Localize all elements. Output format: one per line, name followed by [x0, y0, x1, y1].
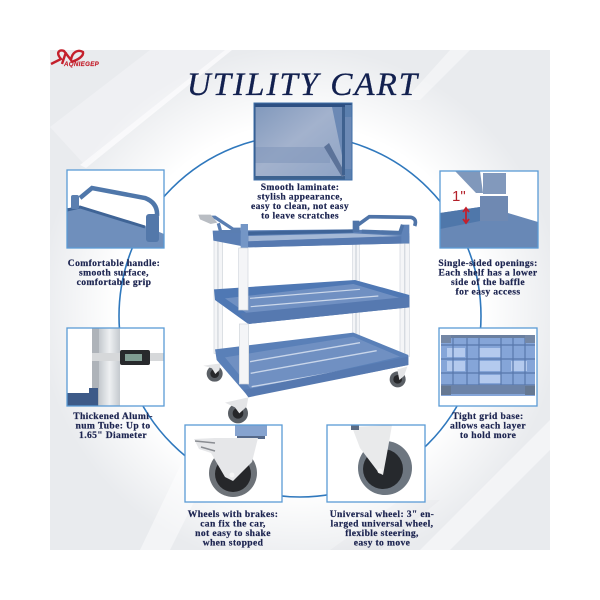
text: aluminum tube: Thickened Alumi- [73, 411, 153, 422]
text: smooth laminate: stylish appearance, [257, 192, 343, 202]
panel: smooth laminate [254, 103, 352, 180]
text: single-sided openings: for easy access [456, 286, 520, 298]
shelf: middle [214, 280, 409, 324]
logo: AQNIEGEP [51, 50, 100, 68]
panel: universal wheel [327, 425, 425, 502]
text: wheel with brake: can fix the car, [200, 518, 266, 530]
text: comfortable handle: comfortable grip [77, 277, 151, 288]
text: single-sided openings: Each shelf has a lower [438, 268, 538, 278]
text: aluminum tube: num Tube: Up to [76, 420, 150, 432]
text: universal wheel: flexible steering, [345, 528, 419, 539]
icon: red double arrow [463, 208, 469, 223]
white front posts [239, 248, 249, 384]
text: wheel with brake: Wheels with brakes: [188, 509, 278, 520]
wheel: front left [225, 397, 248, 423]
label: 1 inch: 1" [452, 188, 466, 205]
text: tight grid base: allows each layer [450, 420, 526, 432]
shelf: bottom [215, 333, 408, 397]
text: wheel with brake: not easy to shake [195, 528, 271, 539]
text: universal wheel: Universal wheel: 3" en- [330, 509, 434, 520]
white rear posts [214, 240, 409, 357]
text: aluminum tube: 1.65" Diameter [79, 430, 147, 441]
text: single-sided openings: side of the baffle [451, 277, 525, 288]
text: single-sided openings: Single-sided openings: [438, 258, 538, 269]
text: comfortable handle: smooth surface, [79, 268, 149, 278]
text: tight grid base: Tight grid base: [452, 411, 524, 422]
panel: tight grid base [439, 328, 537, 406]
text: tight grid base: to hold more [460, 430, 517, 441]
text: wheel with brake: when stopped [203, 538, 264, 548]
background panel [38, 46, 562, 570]
text: comfortable handle: Comfortable handle: [68, 258, 160, 269]
title: UTILITY CART [187, 67, 420, 103]
panel: comfortable handle [67, 170, 164, 248]
text: universal wheel: larged universal wheel, [331, 518, 434, 530]
shelf: top [213, 221, 409, 248]
logo: AQNIEGEP: AQNIEGEP [63, 61, 100, 68]
text: smooth laminate: Smooth laminate: [261, 182, 339, 193]
text: universal wheel: easy to move [354, 538, 411, 548]
cart [198, 215, 415, 423]
text: smooth laminate: to leave scratches [261, 210, 339, 222]
panel: aluminum tube [67, 328, 164, 406]
handle: left [203, 217, 241, 232]
text: smooth laminate: easy to clean, not easy [251, 201, 349, 212]
panel: single-sided openings [440, 171, 538, 248]
handle: right [358, 217, 415, 233]
wheel: rear left [203, 363, 223, 382]
panel: wheel with brake [185, 425, 282, 502]
wheel: rear right [390, 367, 407, 387]
connecting circle line [119, 135, 481, 497]
